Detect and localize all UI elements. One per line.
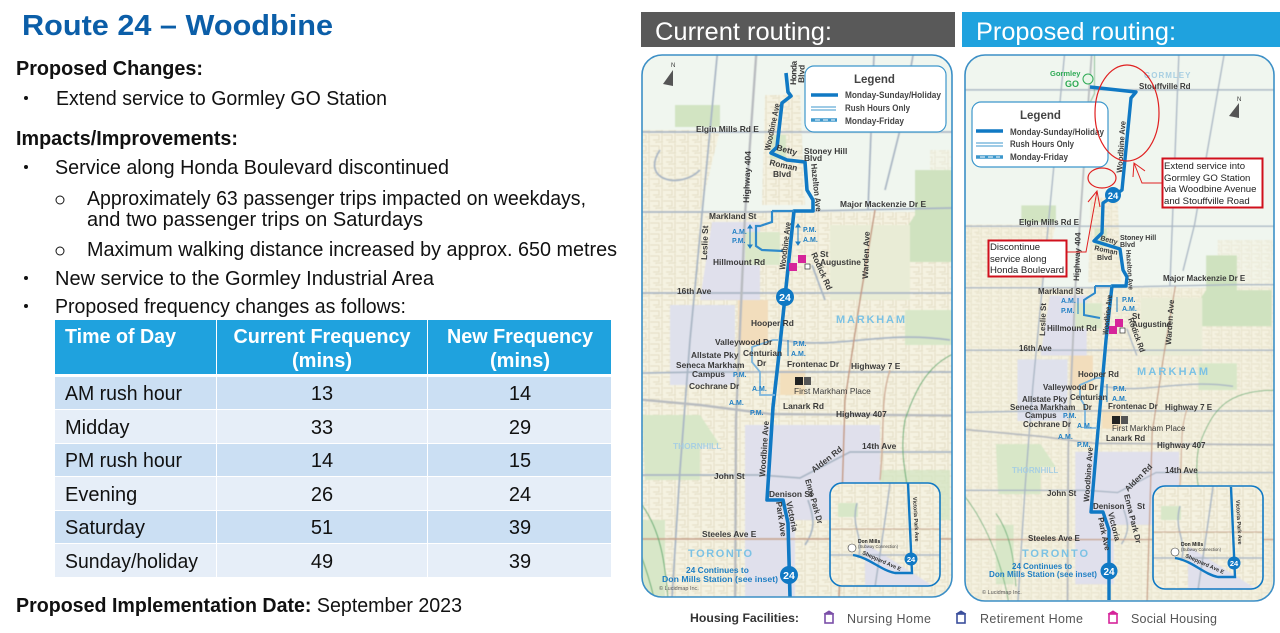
legend: Legend bbox=[1020, 110, 1061, 122]
route badge 24 bbox=[776, 288, 794, 306]
road labels: Valleywood Dr bbox=[1043, 383, 1098, 392]
route line: current bbox=[767, 73, 813, 597]
table rows: 29 bbox=[509, 417, 531, 439]
table rows: AM rush hour bbox=[65, 383, 182, 405]
road labels: 16th Ave bbox=[1019, 344, 1052, 353]
road labels: Cochrane Dr bbox=[689, 381, 740, 391]
road labels: Woodbine Ave bbox=[1082, 446, 1095, 502]
road labels: Lanark Rd bbox=[783, 401, 824, 411]
header: proposed routing: Proposed routing: bbox=[976, 18, 1176, 46]
road labels: Roman bbox=[769, 157, 798, 173]
housing facilities legend: Nursing Home bbox=[847, 612, 931, 626]
table rows: Saturday bbox=[65, 517, 145, 539]
heading: proposed changes: Proposed Changes: bbox=[16, 58, 203, 80]
direction labels: P.M. bbox=[1122, 297, 1136, 304]
direction labels: A.M. bbox=[1122, 306, 1137, 313]
road labels: Augustine bbox=[820, 257, 861, 267]
panel: proposed routing map bbox=[956, 48, 1279, 611]
direction labels bbox=[1058, 297, 1137, 449]
panel: current routing map bbox=[641, 54, 953, 598]
inset map: Sheppard Ave E bbox=[1184, 553, 1225, 576]
direction labels: P.M. bbox=[1113, 386, 1127, 393]
road labels: Steeles Ave E bbox=[1028, 534, 1081, 543]
icons: social housing bbox=[789, 255, 810, 271]
north arrow: N bbox=[1237, 97, 1241, 103]
road labels: Blvd bbox=[1097, 255, 1112, 262]
text: impacts list bbox=[24, 157, 617, 318]
table rows: 39 bbox=[509, 551, 531, 573]
route badge 24 bbox=[1105, 187, 1121, 203]
table rows: 33 bbox=[311, 417, 333, 439]
north arrow bbox=[663, 63, 675, 86]
table rows bbox=[55, 377, 611, 577]
housing facilities legend bbox=[690, 611, 1217, 626]
road labels: Victoria bbox=[784, 500, 800, 533]
road labels: 14th Ave bbox=[1165, 466, 1198, 475]
callout: discontinue service: Discontinue bbox=[990, 242, 1040, 253]
road labels: Woodbine Ave bbox=[1101, 294, 1114, 335]
route badge 24 south: 24 bbox=[1103, 567, 1115, 578]
road labels: Woodbine Ave bbox=[1115, 120, 1128, 173]
road labels: MARKHAM bbox=[1137, 366, 1208, 378]
icons: social housing bbox=[1109, 319, 1125, 334]
header: proposed routing bbox=[962, 12, 1280, 47]
direction labels: P.M. bbox=[733, 372, 747, 379]
road labels: Park Ave bbox=[1096, 517, 1112, 552]
legend: Legend bbox=[854, 74, 895, 86]
road labels: Markland St bbox=[709, 211, 757, 221]
table rows: 39 bbox=[509, 517, 531, 539]
inset map: (Subway Connection) bbox=[858, 544, 899, 549]
callout: extend service: Extend service into bbox=[1164, 161, 1245, 172]
legend: Monday-Friday bbox=[845, 116, 904, 126]
callout: extend service: and Stouffville Road bbox=[1164, 196, 1250, 207]
direction labels: A.M. bbox=[791, 351, 806, 358]
route badge 24: 24 bbox=[1108, 191, 1119, 202]
road labels: Highway 7 E bbox=[1165, 403, 1213, 412]
callout: discontinue service bbox=[988, 240, 1066, 276]
road labels: Woodbine Ave bbox=[762, 102, 782, 151]
table rows: 14 bbox=[311, 450, 333, 472]
table header: New Frequency bbox=[447, 326, 594, 348]
direction labels: A.M. bbox=[1077, 423, 1092, 430]
text: proposed changes list: Extend service to Gormley GO Station bbox=[56, 88, 387, 110]
road labels: Park Ave bbox=[774, 501, 789, 538]
inset map: Don Mills bbox=[858, 539, 880, 545]
inset map: 24 bbox=[907, 555, 916, 564]
direction labels: P.M. bbox=[793, 341, 807, 348]
road labels: Cochrane Dr bbox=[1023, 420, 1071, 429]
route badge 24: 24 bbox=[779, 292, 791, 304]
road labels: GO bbox=[1065, 79, 1079, 89]
road labels: Seneca Markham bbox=[1010, 403, 1075, 412]
road labels: Stoney Hill bbox=[804, 146, 847, 156]
direction labels: P.M. bbox=[1063, 413, 1077, 420]
inset map: (Subway Connection) bbox=[1181, 547, 1222, 552]
rush hour branch bbox=[756, 211, 794, 251]
road labels: Gormley bbox=[1050, 69, 1081, 78]
road labels: Highway 407 bbox=[1157, 441, 1206, 450]
road labels: Hooper Rd bbox=[1078, 370, 1119, 379]
inset map: Victoria Park Ave bbox=[1234, 500, 1242, 545]
direction labels bbox=[729, 224, 818, 417]
road labels: Highway 404 bbox=[1072, 232, 1083, 281]
direction labels: A.M. bbox=[1058, 434, 1073, 441]
road labels: Allstate Pky bbox=[1022, 395, 1068, 404]
route line: proposed bbox=[1090, 87, 1136, 600]
table rows: 24 bbox=[509, 484, 531, 506]
callout: discontinue service: Honda Boulevard bbox=[990, 265, 1064, 276]
icon: social housing bbox=[1108, 611, 1118, 623]
direction labels: A.M. bbox=[732, 229, 747, 236]
inset map bbox=[830, 483, 942, 587]
road labels: St bbox=[1137, 502, 1145, 511]
legend bbox=[972, 102, 1108, 167]
table rows: 14 bbox=[509, 383, 531, 405]
direction labels: A.M. bbox=[803, 237, 818, 244]
legend: Monday-Sunday/Holiday bbox=[845, 90, 941, 100]
road labels: St bbox=[1132, 312, 1140, 321]
heading: impacts: Impacts/Improvements: bbox=[16, 128, 238, 150]
road labels: © Lucidmap Inc. bbox=[982, 589, 1022, 596]
road labels: John St bbox=[1047, 489, 1077, 498]
road labels: Betty bbox=[775, 142, 799, 157]
road labels: Centurian bbox=[1070, 393, 1107, 402]
table rows: 13 bbox=[311, 383, 333, 405]
road labels bbox=[659, 60, 927, 592]
road labels: Blvd bbox=[1120, 242, 1135, 249]
housing facilities legend: Retirement Home bbox=[980, 612, 1083, 626]
table rows: 15 bbox=[509, 450, 531, 472]
text: impacts list: Maximum walking distance increased by approx. 650 metres bbox=[87, 239, 617, 261]
legend: Rush Hours Only bbox=[1010, 139, 1074, 149]
annotation: extension ellipse bbox=[1095, 65, 1159, 161]
road labels: Centurian bbox=[743, 348, 782, 358]
arrow: extension callout bbox=[1133, 163, 1162, 183]
table header: Current Frequency bbox=[234, 326, 411, 348]
road labels: Lanark Rd bbox=[1106, 434, 1145, 443]
road labels: John St bbox=[714, 471, 745, 481]
inset map bbox=[1153, 486, 1265, 590]
road labels: 16th Ave bbox=[677, 286, 712, 296]
direction labels: P.M. bbox=[1077, 442, 1091, 449]
road labels: Dr bbox=[757, 358, 767, 368]
road labels: Highway 404 bbox=[741, 150, 753, 203]
callout: extend service: via Woodbine Avenue bbox=[1164, 184, 1256, 195]
table header: (mins) bbox=[292, 350, 352, 372]
road labels: TORONTO bbox=[1022, 548, 1088, 560]
icon: nursing home bbox=[824, 611, 834, 623]
road labels: Highway 407 bbox=[836, 409, 887, 419]
table rows: Midday bbox=[65, 417, 129, 439]
road labels: Don Mills Station (see inset) bbox=[662, 574, 778, 584]
implementation date: Proposed Implementation Date: September 2023 bbox=[16, 595, 462, 617]
road labels: Woodbine Ave bbox=[757, 420, 771, 477]
table rows: Evening bbox=[65, 484, 137, 506]
road labels: Hillmount Rd bbox=[713, 257, 765, 267]
road labels: Honda bbox=[788, 60, 799, 85]
legend bbox=[805, 66, 946, 132]
direction labels: A.M. bbox=[1112, 396, 1127, 403]
road labels: Leslie St bbox=[1038, 303, 1048, 336]
road labels: THORNHILL bbox=[673, 441, 721, 451]
road labels: Seneca Markham bbox=[676, 360, 744, 370]
table rows: 26 bbox=[311, 484, 333, 506]
table rows: 49 bbox=[311, 551, 333, 573]
road labels: Stoney Hill bbox=[1120, 235, 1156, 242]
north arrow: N bbox=[671, 63, 675, 69]
road labels: Major Mackenzie Dr E bbox=[840, 199, 927, 209]
header: current routing bbox=[641, 12, 955, 47]
road labels: Enna Park Dr bbox=[803, 478, 826, 525]
inset map: Don Mills bbox=[1181, 542, 1203, 548]
road labels: 24 Continues to bbox=[1012, 562, 1072, 571]
housing facilities legend: Social Housing bbox=[1131, 612, 1217, 626]
road labels: Don Mills Station (see inset) bbox=[989, 570, 1097, 579]
road labels: Alden Rd bbox=[1123, 462, 1154, 493]
icon: retirement home bbox=[956, 611, 966, 623]
road labels: Denison St bbox=[769, 489, 813, 499]
icon: parking bbox=[1112, 416, 1128, 424]
text: impacts list: New service to the Gormley Industrial Area bbox=[55, 268, 435, 290]
road labels: Campus bbox=[692, 369, 725, 379]
road labels: TORONTO bbox=[688, 548, 752, 560]
road labels: 14th Ave bbox=[862, 441, 897, 451]
road labels: Valleywood Dr bbox=[715, 337, 773, 347]
road labels: Denison bbox=[1093, 502, 1125, 511]
road labels: Steeles Ave E bbox=[702, 529, 757, 539]
road labels: Elgin Mills Rd E bbox=[1019, 218, 1080, 227]
road labels: Rodick Rd bbox=[809, 251, 835, 291]
text: impacts list: Proposed frequency changes as follows: bbox=[55, 296, 406, 318]
text: impacts list: Approximately 63 passenger trips impacted on weekdays, bbox=[87, 188, 586, 210]
direction labels: P.M. bbox=[750, 410, 764, 417]
road labels: GORMLEY bbox=[1144, 71, 1191, 80]
road labels: Stouffville Rd bbox=[1139, 82, 1191, 91]
road labels: Rodick Rd bbox=[1126, 317, 1147, 354]
road labels: MARKHAM bbox=[836, 314, 905, 326]
text: impacts list: Service along Honda Boulevard discontinued bbox=[55, 157, 449, 179]
callout: discontinue service: service along bbox=[990, 254, 1047, 265]
callout: extend service bbox=[1162, 158, 1262, 208]
road labels: Hazelton Ave bbox=[1124, 250, 1134, 290]
road labels: St bbox=[820, 249, 829, 259]
inset map: Sheppard Ave E bbox=[861, 550, 902, 573]
table rows: Sunday/holiday bbox=[65, 551, 198, 573]
table header: (mins) bbox=[490, 350, 550, 372]
direction labels: A.M. bbox=[1061, 298, 1076, 305]
road labels: © Lucidmap Inc. bbox=[659, 585, 699, 592]
road labels: Warden Ave bbox=[860, 231, 872, 279]
callout: extend service: Gormley GO Station bbox=[1164, 173, 1250, 184]
table rows: 51 bbox=[311, 517, 333, 539]
road labels: Leslie St bbox=[699, 225, 710, 260]
table header bbox=[55, 320, 611, 374]
road labels: Betty bbox=[1099, 235, 1118, 246]
direction labels: P.M. bbox=[732, 238, 746, 245]
road labels: Roman bbox=[1094, 245, 1118, 257]
road labels: Augustine bbox=[1132, 320, 1172, 329]
road labels: Enna Park Dr bbox=[1122, 493, 1143, 544]
road labels: Alden Rd bbox=[809, 444, 844, 475]
road labels: Blvd bbox=[773, 169, 791, 179]
road labels bbox=[982, 69, 1246, 596]
legend: Rush Hours Only bbox=[845, 103, 910, 113]
road labels: Elgin Mills Rd E bbox=[696, 124, 759, 134]
legend: Monday-Friday bbox=[1010, 152, 1068, 162]
road labels: First Markham Place bbox=[794, 386, 871, 396]
road labels: Hillmount Rd bbox=[1047, 324, 1097, 333]
rush hour branch bbox=[1084, 286, 1112, 318]
road labels: Warden Ave bbox=[1164, 299, 1176, 345]
road labels: Campus bbox=[1025, 411, 1057, 420]
road labels: 24 Continues to bbox=[686, 565, 749, 575]
road labels: Highway 7 E bbox=[851, 361, 901, 371]
icon: parking bbox=[795, 377, 811, 385]
road labels: Woodbine Ave bbox=[777, 221, 793, 270]
title: Route 24 – Woodbine bbox=[22, 10, 333, 42]
direction labels: A.M. bbox=[729, 400, 744, 407]
annotation: honda ellipse bbox=[1088, 168, 1116, 188]
road labels: Victoria bbox=[1106, 511, 1122, 542]
direction labels: P.M. bbox=[803, 227, 817, 234]
road labels: Major Mackenzie Dr E bbox=[1163, 274, 1246, 283]
road labels: Dr bbox=[1083, 403, 1092, 412]
road labels: THORNHILL bbox=[1012, 466, 1058, 475]
text: impacts list: and two passenger trips on Saturdays bbox=[87, 209, 423, 231]
road labels: Frontenac Dr bbox=[1108, 402, 1158, 411]
route badge 24 south bbox=[1100, 562, 1118, 580]
road labels: Allstate Pky bbox=[691, 350, 739, 360]
housing facilities legend: Housing Facilities: bbox=[690, 611, 799, 625]
road labels: Blvd bbox=[804, 153, 822, 163]
table rows: PM rush hour bbox=[65, 450, 182, 472]
arrow: discontinue callout bbox=[1067, 191, 1100, 252]
road labels: Frontenac Dr bbox=[787, 359, 840, 369]
road labels: Markland St bbox=[1038, 287, 1084, 296]
inset map: Victoria Park Ave bbox=[911, 497, 919, 542]
direction labels: P.M. bbox=[1061, 308, 1075, 315]
frequency table bbox=[55, 320, 611, 577]
legend: Monday-Sunday/Holiday bbox=[1010, 127, 1104, 137]
road labels: Blvd bbox=[796, 65, 807, 83]
route badge 24 south: 24 bbox=[783, 570, 795, 582]
inset map: 24 bbox=[1230, 559, 1239, 568]
north arrow bbox=[1229, 97, 1241, 118]
table header: Time of Day bbox=[65, 326, 177, 348]
road labels: Hooper Rd bbox=[751, 318, 794, 328]
road labels: Hazelton Ave bbox=[809, 163, 824, 212]
header: current routing: Current routing: bbox=[655, 18, 832, 46]
route badge 24 south bbox=[780, 566, 798, 584]
direction labels: A.M. bbox=[752, 386, 767, 393]
road labels: First Markham Place bbox=[1112, 424, 1186, 433]
